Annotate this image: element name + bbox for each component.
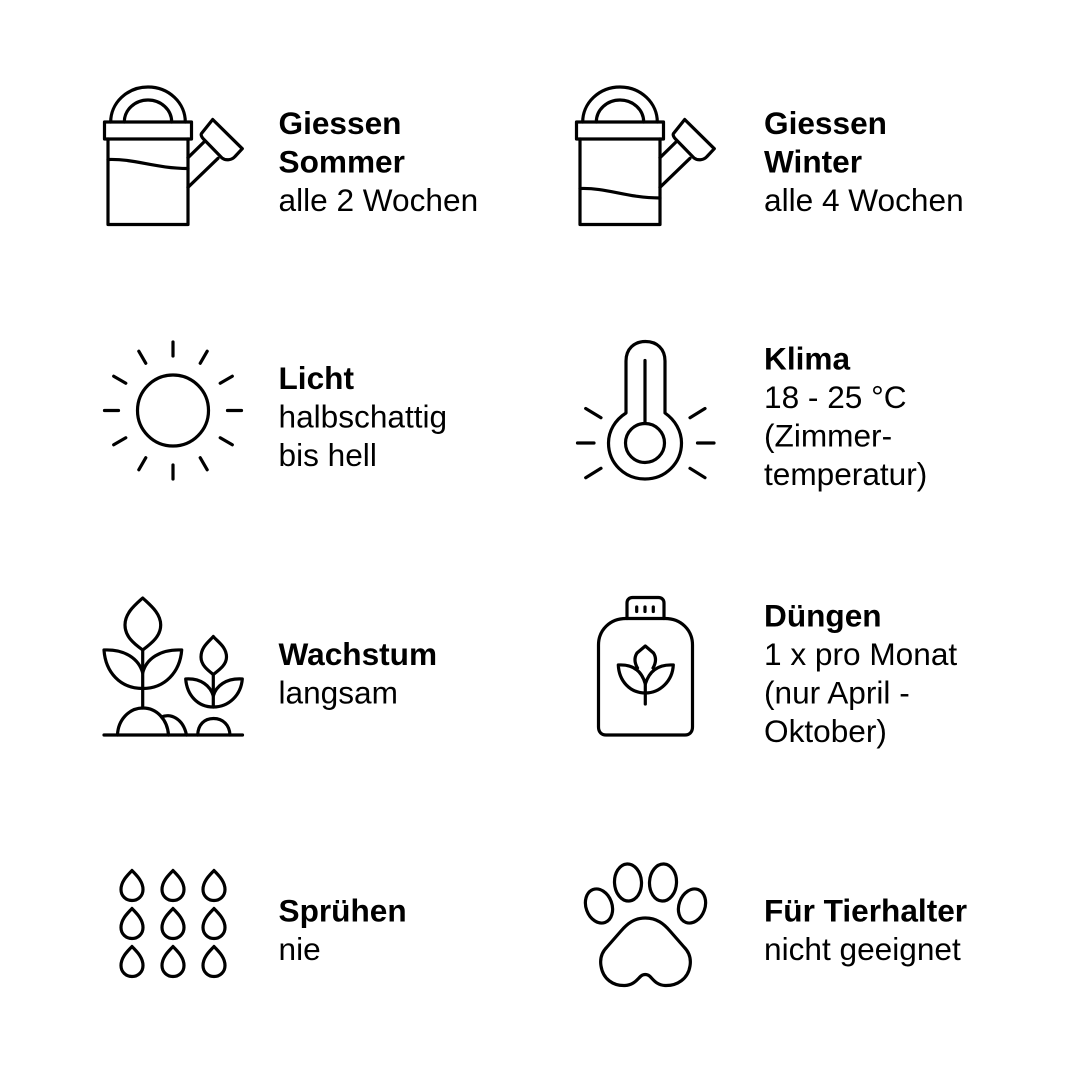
icon: thermometer	[578, 342, 714, 479]
text: Wachstum: Wachstum	[278, 636, 437, 672]
panel: Giessen Winter	[576, 87, 964, 224]
icon: sun	[104, 342, 242, 479]
text: Licht: bis hell	[278, 437, 377, 473]
text: Giessen Sommer: Giessen	[278, 105, 401, 141]
text: Düngen: (nur April -	[764, 674, 910, 710]
icon: watering can, low water	[576, 87, 714, 224]
text: Giessen Sommer: alle 2 Wochen	[278, 182, 478, 218]
text: Licht: halbschattig	[278, 398, 447, 434]
icon: paw print	[581, 863, 710, 986]
icon: water drops	[121, 870, 225, 976]
text: Klima: 18 - 25 °C	[764, 379, 907, 415]
text: Düngen: 1 x pro Monat	[764, 636, 957, 672]
panel: Für Tierhalter	[581, 863, 967, 986]
text: Für Tierhalter: Für Tierhalter	[764, 892, 967, 928]
panel: Düngen	[598, 598, 957, 749]
text: Klima: Klima	[764, 340, 850, 376]
text: Düngen: Düngen	[764, 598, 882, 634]
panel: Sprühen	[121, 870, 407, 976]
text: Sprühen: Sprühen	[278, 892, 407, 928]
text: Klima: (Zimmer-	[764, 418, 892, 454]
icon: growing plants	[104, 598, 242, 735]
text: Düngen: Oktober)	[764, 713, 887, 749]
text: Für Tierhalter: nicht geeignet	[764, 931, 961, 967]
text: Giessen Winter: Winter	[764, 144, 862, 180]
text: Giessen Winter: Giessen	[764, 105, 887, 141]
text: Giessen Winter: alle 4 Wochen	[764, 182, 964, 218]
panel: Wachstum	[104, 598, 437, 735]
text: Giessen Sommer: Sommer	[278, 144, 405, 180]
text: Sprühen: nie	[278, 931, 321, 967]
icon: fertilizer bottle	[598, 598, 692, 735]
panel: Giessen Sommer	[104, 87, 478, 224]
icon: watering can, fuller	[104, 87, 242, 224]
text: Licht: Licht	[278, 360, 354, 396]
panel: Licht	[104, 342, 447, 479]
panel: Klima	[578, 340, 927, 492]
text: Klima: temperatur)	[764, 456, 927, 492]
text: Wachstum: langsam	[278, 674, 398, 710]
